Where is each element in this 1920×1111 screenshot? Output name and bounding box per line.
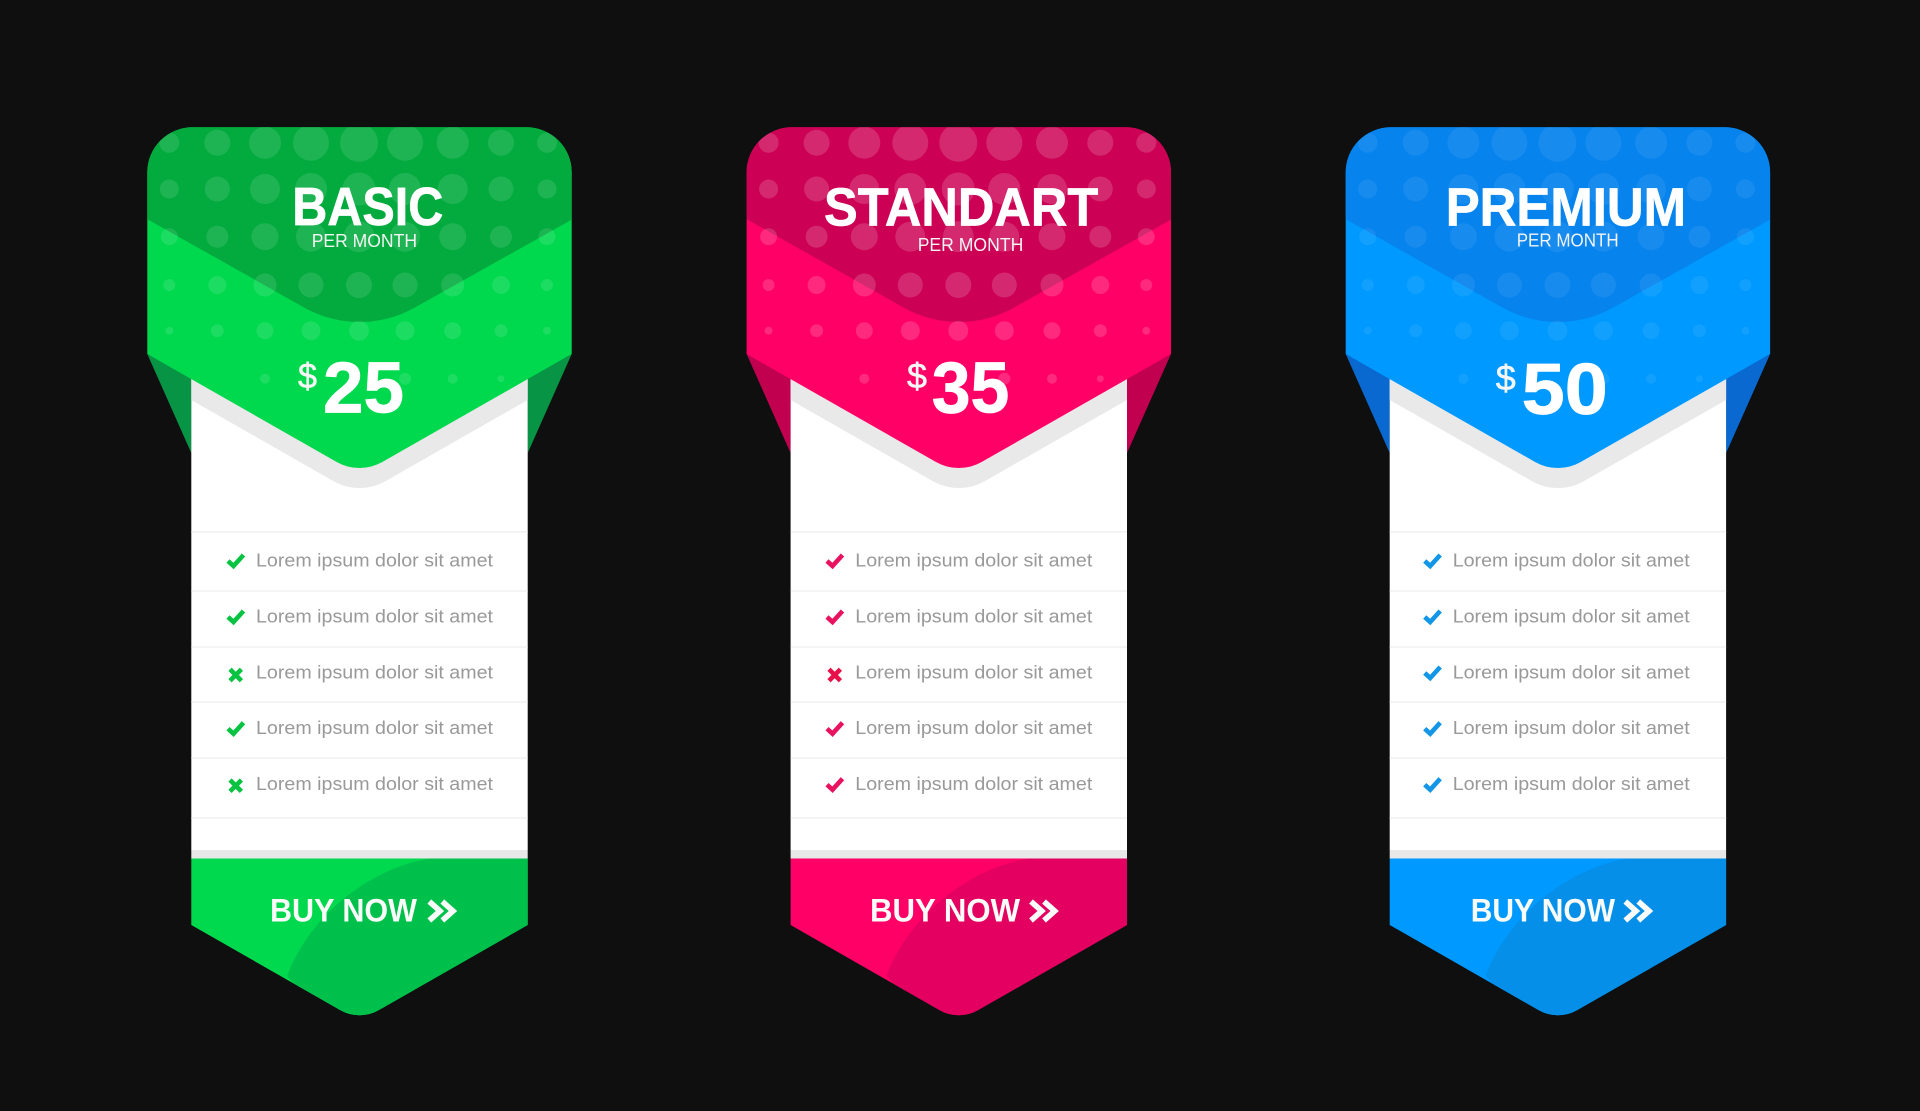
- feature row 4: Lorem ipsum dolor sit amet: [256, 717, 493, 738]
- buy now button: BUY NOW: [870, 893, 1021, 929]
- feature row 3: Lorem ipsum dolor sit amet: [855, 662, 1092, 683]
- icon: double chevron: [429, 902, 453, 920]
- buy now button: [1390, 858, 1726, 1016]
- feature row 4: Lorem ipsum dolor sit amet: [1453, 717, 1690, 738]
- feature row 4: Lorem ipsum dolor sit amet: [855, 717, 1092, 738]
- feature row 1: Lorem ipsum dolor sit amet: [256, 550, 493, 571]
- header shadow: [791, 378, 1127, 488]
- header shape: [147, 127, 572, 468]
- card footer strip: [191, 850, 528, 858]
- halftone dots: [159, 124, 557, 385]
- side folds: [1346, 354, 1770, 453]
- panel: basic plan: [140, 120, 580, 1030]
- header shadow: [1390, 378, 1726, 488]
- feature card body: [191, 370, 528, 850]
- card footer strip: [1390, 850, 1726, 858]
- side folds: [747, 354, 1171, 453]
- row separators: [1390, 532, 1726, 818]
- icon: double chevron: [1031, 902, 1055, 920]
- header shape: [747, 127, 1171, 468]
- title: BASIC: [292, 177, 443, 237]
- header shadow: [191, 378, 528, 488]
- feature row 1: Lorem ipsum dolor sit amet: [1453, 550, 1690, 571]
- halftone dots: [1358, 124, 1755, 385]
- title: PREMIUM: [1446, 178, 1686, 238]
- buy now button: [191, 858, 528, 1016]
- header dark overlay: [1338, 120, 1778, 322]
- buy now button: [790, 858, 1127, 1016]
- card footer strip: [791, 850, 1127, 858]
- feature row 2: Lorem ipsum dolor sit amet: [256, 606, 493, 627]
- subtitle: PER MONTH: [1517, 231, 1619, 251]
- icon: double chevron: [1625, 902, 1649, 920]
- currency sign: $: [1496, 359, 1516, 398]
- buy now button: BUY NOW: [270, 893, 418, 929]
- price: 25: [323, 349, 404, 429]
- row separators: [791, 532, 1127, 818]
- subtitle: PER MONTH: [918, 235, 1023, 255]
- subtitle: PER MONTH: [312, 231, 417, 251]
- feature card body: [791, 370, 1127, 850]
- feature row 5: Lorem ipsum dolor sit amet: [256, 773, 493, 794]
- buy now button: BUY NOW: [1471, 893, 1616, 929]
- panel: standart plan: [739, 120, 1179, 1030]
- header dark overlay: [140, 120, 580, 322]
- row separators: [191, 532, 528, 818]
- feature row 2: Lorem ipsum dolor sit amet: [1453, 606, 1690, 627]
- feature row 3: Lorem ipsum dolor sit amet: [256, 662, 493, 683]
- title: STANDART: [824, 178, 1098, 238]
- feature row 3: Lorem ipsum dolor sit amet: [1453, 662, 1690, 683]
- side folds: [147, 354, 572, 453]
- feature row 2: Lorem ipsum dolor sit amet: [855, 606, 1092, 627]
- price: 50: [1522, 350, 1608, 430]
- feature row 5: Lorem ipsum dolor sit amet: [855, 773, 1092, 794]
- price: 35: [932, 349, 1009, 429]
- feature card body: [1390, 370, 1726, 850]
- currency sign: $: [907, 357, 927, 396]
- feature row 1: Lorem ipsum dolor sit amet: [855, 550, 1092, 571]
- header shape: [1346, 127, 1770, 468]
- currency sign: $: [298, 357, 317, 396]
- halftone dots: [759, 124, 1156, 385]
- panel: premium plan: [1338, 120, 1778, 1030]
- header dark overlay: [739, 120, 1179, 322]
- feature row 5: Lorem ipsum dolor sit amet: [1453, 773, 1690, 794]
